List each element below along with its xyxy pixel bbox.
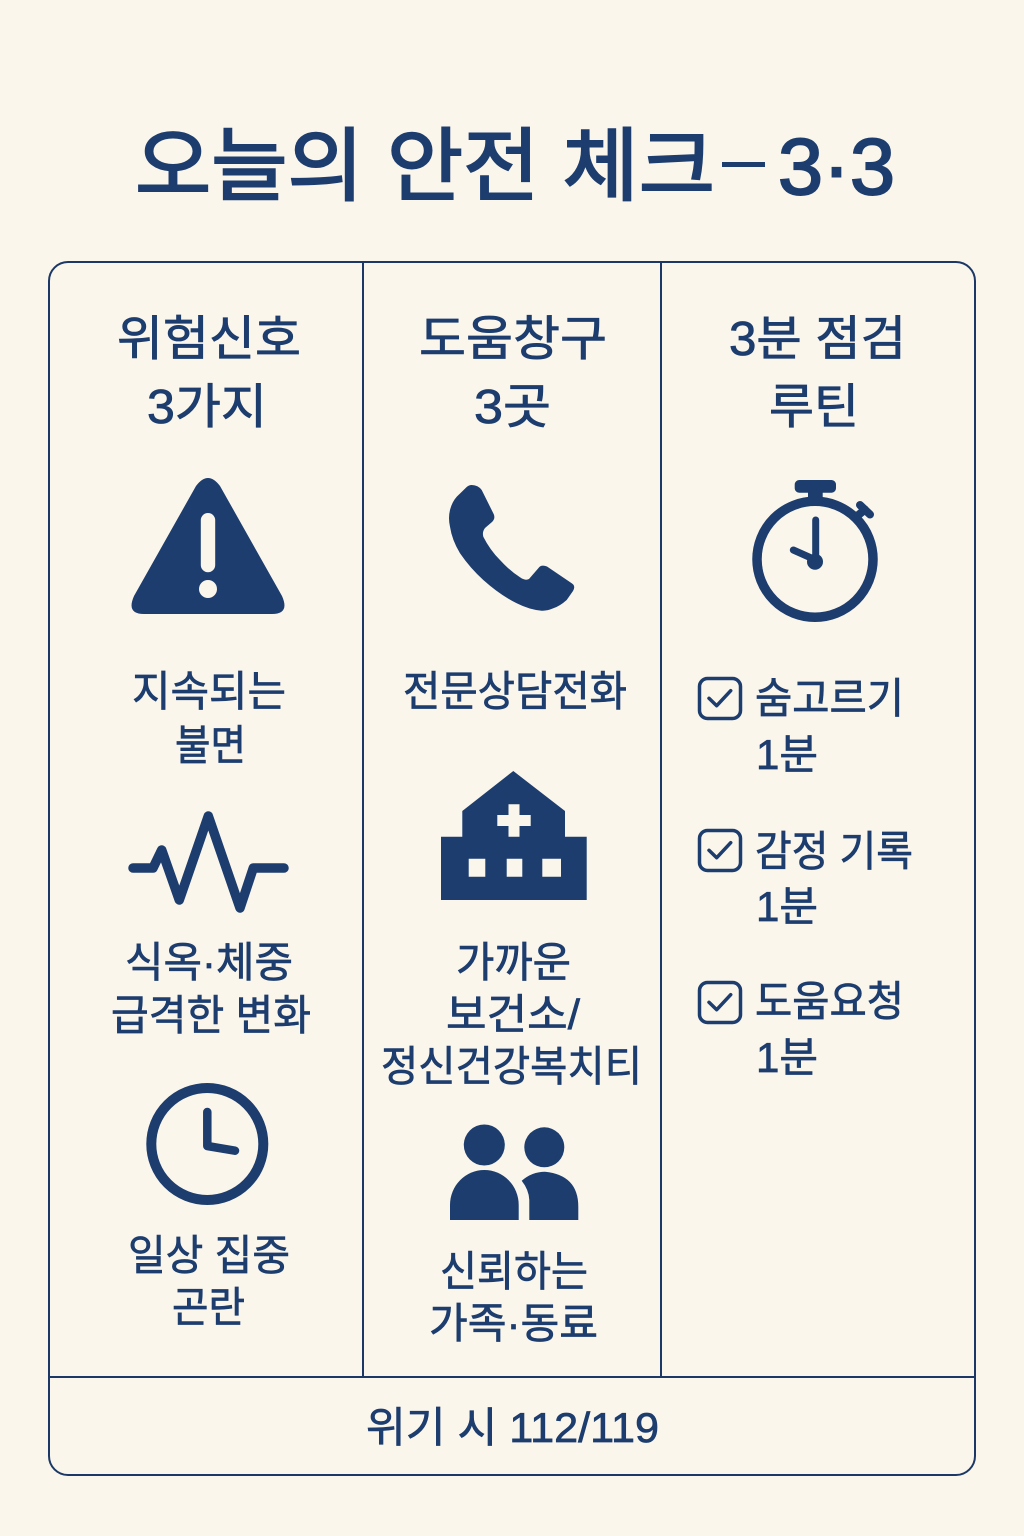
text: appetite and weight change: 식옥·체중 (125, 939, 293, 986)
text: nearby health centre: 보건소/ (446, 991, 580, 1038)
footer: emergency numbers: 위기 시 112/119 (366, 1404, 659, 1451)
text: trusted family and colleagues: 가족·동료 (429, 1300, 598, 1347)
checklist item: breathing: 1분 (756, 731, 818, 778)
panel: danger signals (111, 313, 311, 1331)
text: persistent insomnia (132, 668, 286, 769)
panel: three minute routine (700, 313, 913, 1081)
checklist item: emotion log: 1분 (756, 883, 818, 930)
text: counselling phone: 전문상담전화 (403, 668, 627, 715)
checklist item: breathing (700, 675, 904, 778)
text: nearby health centre (381, 939, 642, 1090)
text: trusted family and colleagues (429, 1248, 598, 1347)
text: persistent insomnia: 지속되는 (132, 668, 286, 715)
text: trusted family and colleagues: 신뢰하는 (440, 1248, 588, 1295)
icon: checkbox (700, 830, 740, 870)
title: 3·3 (778, 122, 895, 211)
checklist item: breathing: 숨고르기 (755, 675, 904, 722)
text: trouble concentrating: 곤란 (172, 1284, 245, 1331)
heading: three minute routine: 루틴 (769, 381, 859, 434)
icon: telephone (449, 485, 574, 611)
heading: danger signals (117, 313, 301, 434)
icon: hospital (441, 771, 587, 900)
icon: pulse line (133, 816, 284, 908)
main panel frame (49, 262, 975, 1475)
text: trouble concentrating: 일상 집중 (128, 1232, 290, 1279)
text: persistent insomnia: 불면 (175, 722, 246, 769)
heading: three minute routine: 3분 점검 (729, 313, 906, 366)
checklist item: ask for help: 도움요청 (755, 978, 904, 1025)
heading: help contacts: 도움창구 (419, 313, 607, 366)
text: trouble concentrating (128, 1232, 290, 1331)
checklist item: emotion log: 감정 기록 (755, 828, 913, 875)
checklist item: ask for help: 1분 (756, 1034, 818, 1081)
heading: help contacts (419, 313, 607, 434)
icon: warning triangle (132, 478, 284, 614)
text: nearby health centre: 가까운 (456, 939, 571, 986)
heading: danger signals: 3가지 (147, 381, 267, 434)
icon: two people (450, 1124, 578, 1220)
text: appetite and weight change: 급격한 변화 (111, 992, 311, 1039)
checklist item: ask for help (700, 978, 904, 1081)
checklist item: emotion log (700, 828, 913, 930)
heading: danger signals: 위험신호 (117, 313, 301, 366)
title: 오늘의 안전 체크 (135, 122, 715, 211)
heading: three minute routine (729, 313, 906, 434)
text: nearby health centre: 정신건강복치티 (381, 1043, 642, 1090)
icon: checkbox (700, 982, 740, 1022)
icon: checkbox (700, 678, 740, 718)
panel: help contacts (381, 313, 642, 1347)
text: appetite and weight change (111, 939, 311, 1039)
icon: clock (151, 1088, 263, 1200)
heading: help contacts: 3곳 (474, 381, 551, 434)
icon: stopwatch (757, 480, 873, 617)
